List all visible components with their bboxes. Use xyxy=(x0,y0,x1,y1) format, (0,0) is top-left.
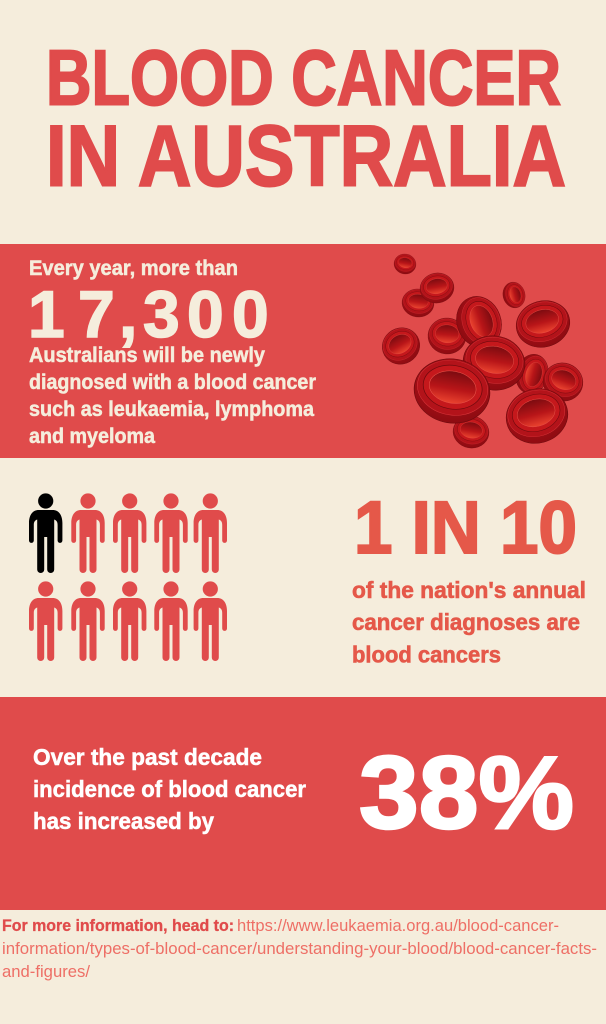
footer: more information link: and-figures/ xyxy=(2,963,90,981)
footer: more information link: https://www.leukaemia.org.au/blood-cancer- xyxy=(237,917,559,935)
text: every year, more than 17,300: Australians will be newly xyxy=(29,344,265,367)
icon: red person xyxy=(154,493,188,573)
text: every year, more than 17,300: Every year, more than xyxy=(29,257,238,280)
text: over the past decade: Over the past decade xyxy=(33,744,262,770)
text: every year, more than 17,300 xyxy=(28,257,316,448)
footer: more information link: For more information, head to: xyxy=(2,917,234,935)
chart: ten people pictogram xyxy=(29,493,227,661)
icon: black person xyxy=(29,493,62,573)
icon: red person xyxy=(71,581,105,661)
panel: new diagnoses xyxy=(0,244,606,458)
statistic: 38 percent: 38% xyxy=(359,735,574,850)
text: every year, more than 17,300: 17,300 xyxy=(28,277,269,351)
text: every year, more than 17,300: diagnosed with a blood cancer xyxy=(29,371,316,394)
text: every year, more than 17,300: and myeloma xyxy=(29,425,155,448)
icon: red person xyxy=(29,581,62,661)
text: annual cancer diagnoses: of the nation's annual xyxy=(352,577,586,603)
text: over the past decade xyxy=(33,744,306,834)
text: every year, more than 17,300: such as leukaemia, lymphoma xyxy=(29,398,314,421)
icon: red person xyxy=(154,581,188,661)
text: over the past decade: has increased by xyxy=(33,808,214,834)
text: annual cancer diagnoses: blood cancers xyxy=(352,642,501,668)
icon: red person xyxy=(113,493,146,573)
icon: red person xyxy=(113,581,146,661)
text: over the past decade: incidence of blood cancer xyxy=(33,776,306,802)
footer: more information link xyxy=(2,917,597,981)
icon: red person xyxy=(194,493,227,573)
icon: red blood cells xyxy=(376,252,588,451)
heading: 1 in 10: 1 IN 10 xyxy=(354,486,577,569)
text: annual cancer diagnoses xyxy=(352,577,586,668)
footer: more information link: information/types-of-blood-cancer/understanding-your-blood/blood-cancer-facts- xyxy=(2,940,597,958)
text: annual cancer diagnoses: cancer diagnoses are xyxy=(352,609,580,635)
icon: red person xyxy=(71,493,105,573)
icon: red person xyxy=(194,581,227,661)
title xyxy=(46,34,566,204)
panel: incidence increase xyxy=(0,697,606,910)
